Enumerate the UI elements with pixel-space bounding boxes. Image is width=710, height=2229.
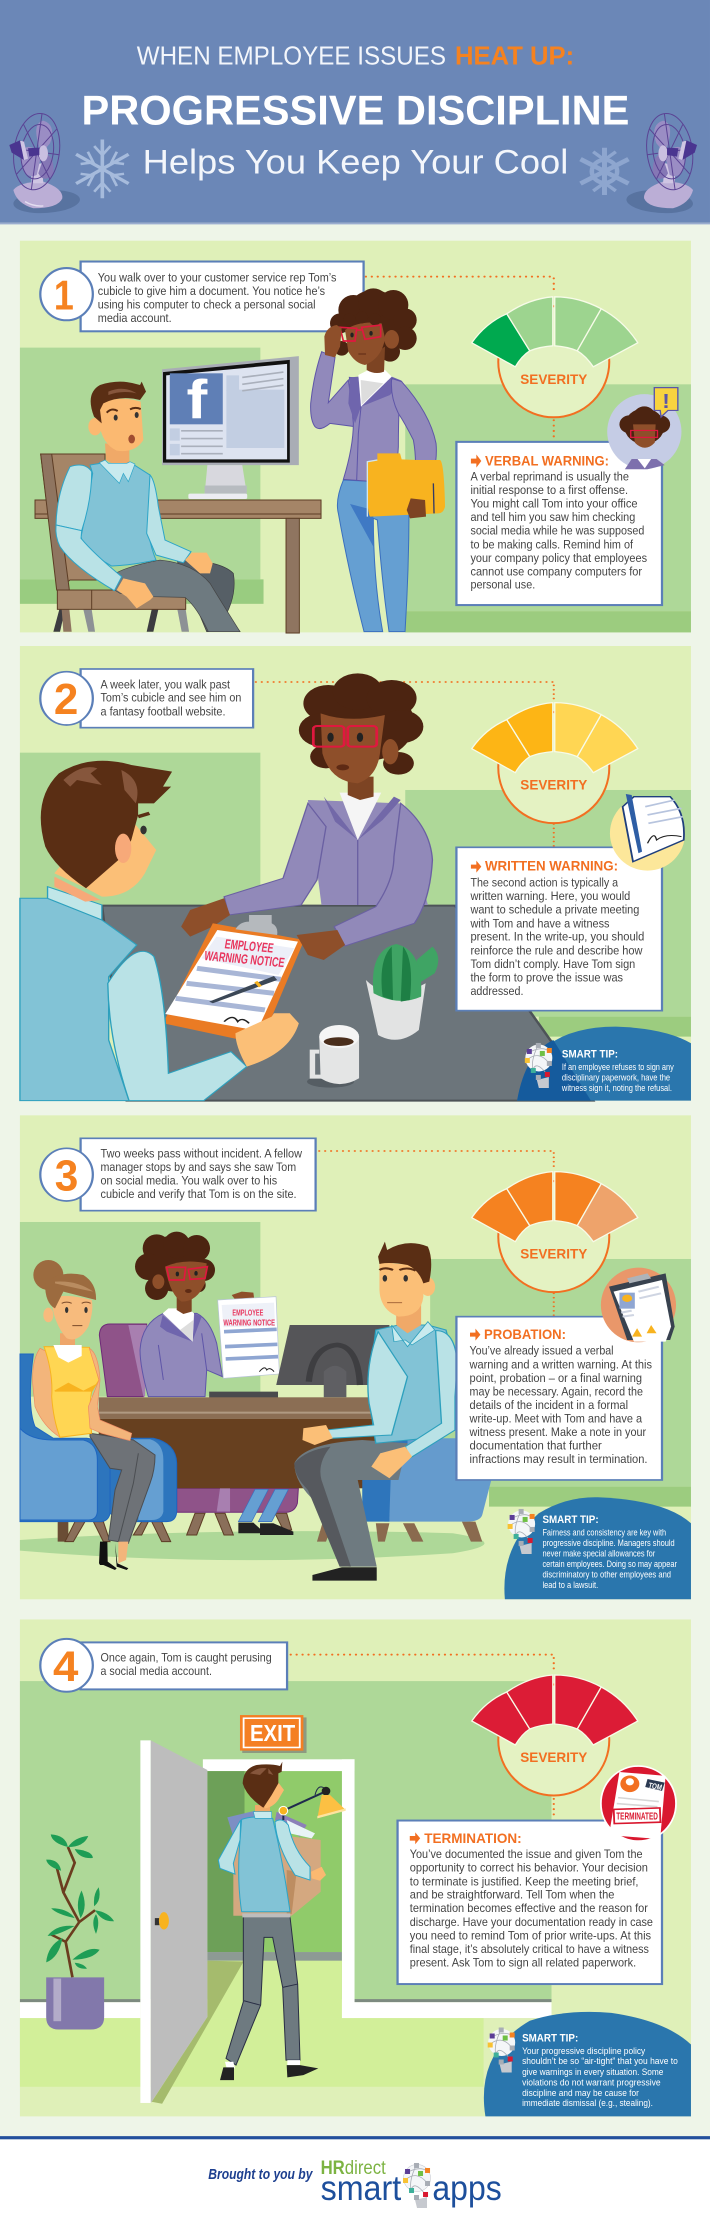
smart tip 4: discipline and may be cause for	[522, 2088, 639, 2099]
text box: termination: final stage, it’s absolutely critical to have a witness	[410, 1942, 649, 1956]
illustration: cactus in pot	[366, 944, 438, 1040]
callout: step 4 scenario: a social media account.	[101, 1664, 212, 1678]
logo: HRdirect smart apps: HRdirect	[321, 2158, 386, 2179]
callout: step 1 scenario: using his computer to check a personal social	[98, 298, 316, 311]
illustration: computer monitor with social page: f	[187, 369, 208, 430]
icon: smart bulb	[403, 2163, 431, 2208]
smart tip 4: Your progressive discipline policy	[522, 2047, 645, 2057]
text box: termination: TERMINATION:	[424, 1832, 522, 1847]
text box: termination: opportunity to correct his behavior. Your decision	[410, 1860, 648, 1874]
text box: verbal warning	[456, 442, 662, 605]
text box: verbal warning: initial response to a first offense.	[470, 484, 628, 497]
smart tip 3: lead to a lawsuit.	[542, 1580, 598, 1590]
icon: manager avatar with alert: !	[662, 390, 670, 413]
callout: step 4 scenario: Once again, Tom is caught perusing	[101, 1650, 272, 1664]
text box: termination: You’ve documented the issue and given Tom the	[410, 1847, 643, 1861]
severity gauge 4: SEVERITY	[520, 1749, 588, 1765]
text box: termination	[398, 1821, 662, 1984]
illustration: Tom leaving with box	[218, 1762, 346, 2080]
illustration: employee warning notice clipboard	[163, 915, 345, 1044]
step number 4: 4	[53, 1642, 79, 1690]
callout: step 1 scenario: cubicle to give him a document. You notice he’s	[98, 285, 325, 298]
panel 1: verbal warning	[20, 241, 691, 633]
dotted connector	[291, 1655, 554, 1819]
text box: probation: PROBATION:	[484, 1327, 566, 1342]
callout: step 4 scenario	[81, 1642, 287, 1689]
step number 3	[40, 1148, 93, 1201]
logo: HRdirect smart apps: apps	[432, 2169, 502, 2208]
severity gauge 2: SEVERITY	[520, 777, 588, 793]
severity gauge 2	[472, 703, 638, 823]
smart tip 3	[504, 1497, 691, 1599]
text box: verbal warning: VERBAL WARNING:	[485, 454, 609, 469]
callout: step 3 scenario: on social media. You walk over to his	[101, 1175, 277, 1188]
text box: written warning	[456, 847, 662, 1011]
header banner	[0, 0, 710, 224]
step number 1	[40, 268, 93, 320]
illustration: computer monitor with social page	[162, 356, 299, 499]
icon: right snowflake	[580, 148, 628, 195]
illustration: seated man at desk	[35, 382, 321, 633]
step number 1: 1	[54, 272, 74, 319]
callout: step 3 scenario	[81, 1138, 316, 1211]
panel 4: termination	[20, 1619, 691, 2116]
step number 2	[40, 672, 93, 725]
text box: written warning: WRITTEN WARNING:	[485, 859, 618, 874]
illustration: woman in blue chair	[20, 1260, 177, 1570]
illustration: open exit door	[140, 1740, 355, 2104]
icon: manager avatar with alert	[607, 388, 681, 469]
text box: probation	[456, 1317, 662, 1480]
severity gauge 3	[472, 1172, 638, 1292]
logo: HRdirect smart apps: smart	[321, 2169, 402, 2208]
text box: termination: you need to remind Tom of prior write-ups. At this	[410, 1928, 651, 1942]
title line 2: PROGRESSIVE DISCIPLINE	[82, 88, 629, 134]
text box: written warning: with Tom and have a witness	[470, 917, 609, 931]
dotted connector	[366, 277, 554, 441]
text box: verbal warning: A verbal reprimand is usually the	[470, 470, 629, 483]
text box: written warning: The second action is typically a	[470, 877, 618, 890]
text box: verbal warning: cannot use company computers for	[470, 565, 642, 578]
severity gauge 1	[472, 297, 638, 417]
text box: probation: You’ve already issued a verbal	[470, 1345, 614, 1358]
severity gauge 4	[472, 1675, 638, 1796]
icon: terminated record	[601, 1766, 676, 1841]
illustration: coffee mug	[307, 1025, 359, 1088]
icon: terminated record: TOM	[648, 1780, 663, 1792]
step number 3: 3	[55, 1152, 78, 1200]
icon: left snowflake	[76, 140, 129, 198]
icon: signed paper and pen	[610, 794, 685, 871]
icon: smart bulb	[488, 2027, 515, 2073]
callout: step 3 scenario: Two weeks pass without incident. A fellow	[101, 1147, 303, 1161]
callout: step 3 scenario: cubicle and verify that Tom is on the site.	[101, 1188, 297, 1201]
illustration: employee seen from behind	[20, 761, 299, 1101]
text box: verbal warning: You might call Tom into your office	[470, 497, 638, 510]
text box: probation: documentation that further	[470, 1440, 602, 1453]
title line 3: Helps You Keep Your Cool	[143, 142, 568, 181]
severity gauge 1: SEVERITY	[520, 371, 588, 387]
icon: employee record on clipboard	[601, 1268, 676, 1342]
smart tip 2	[517, 1027, 691, 1101]
illustration: manager with notice behind desk	[99, 1232, 298, 1535]
text box: written warning: addressed.	[470, 985, 523, 998]
callout: step 1 scenario: You walk over to your customer service rep Tom’s	[98, 271, 336, 284]
text box: termination: to terminate is justified. Keep the meeting brief,	[410, 1874, 638, 1888]
footer	[0, 2136, 710, 2229]
text box: written warning: Tom didn’t comply. Have Tom sign	[470, 958, 635, 971]
text box: written warning: written warning. Here, you would	[470, 890, 630, 903]
icon: terminated record: TERMINATED	[616, 1811, 658, 1822]
severity gauge 3: SEVERITY	[520, 1246, 588, 1262]
illustration: employee warning notice clipboard: EMPLOYEE	[224, 937, 274, 956]
icon: smart bulb	[525, 1043, 552, 1088]
illustration: manager across the table	[181, 673, 432, 946]
callout: step 2 scenario	[81, 669, 253, 728]
smart tip 4	[484, 2012, 691, 2116]
callout: step 2 scenario: Tom’s cubicle and see him on	[101, 692, 241, 705]
callout: step 1 scenario: media account.	[98, 311, 172, 325]
text box: termination: termination becomes effective and the reason for	[410, 1901, 649, 1915]
illustration: exit sign	[240, 1715, 307, 1753]
text box: verbal warning: and tell him you saw him checking	[470, 511, 635, 524]
step number 4	[40, 1639, 93, 1692]
callout: step 2 scenario: a fantasy football website.	[101, 706, 225, 719]
smart tip 4: violations do not warrant progressive	[522, 2078, 661, 2088]
text box: written warning: the form to prove the issue was	[470, 971, 623, 985]
smart tip 4: SMART TIP:	[522, 2031, 578, 2044]
text box: verbal warning: personal use.	[470, 578, 535, 592]
icon: right fan	[626, 111, 697, 215]
panel 3: probation	[20, 1115, 691, 1599]
illustration: manager with notice behind desk: WARNING NOTICE	[223, 1318, 275, 1328]
illustration: desk with computer	[99, 1325, 389, 1488]
title line 1: WHEN EMPLOYEE ISSUES	[137, 41, 446, 70]
dotted connector	[319, 1151, 554, 1316]
text box: termination: and be straightforward. Tell Tom when the	[410, 1888, 614, 1902]
illustration: Tom in blue chair	[294, 1242, 491, 1581]
illustration: exit sign: EXIT	[250, 1722, 295, 1747]
icon: smart bulb	[508, 1509, 535, 1554]
illustration: employee warning notice clipboard: WARNING NOTICE	[203, 949, 286, 971]
smart tip 4: give warnings in every situation. Some	[522, 2067, 664, 2078]
callout: step 2 scenario: A week later, you walk past	[101, 678, 230, 692]
illustration: standing manager with folder	[311, 288, 445, 632]
dotted connector	[256, 682, 554, 847]
smart tip 3: SMART TIP:	[542, 1513, 599, 1525]
smart tip 2: SMART TIP:	[562, 1048, 618, 1060]
text box: verbal warning: social media while he was supposed	[470, 524, 644, 537]
logo: HRdirect smart apps	[321, 2158, 502, 2208]
panel 2: written warning	[20, 646, 691, 1101]
illustration: potted plant	[46, 1834, 114, 2029]
text box: verbal warning: to be making calls. Remind him of	[470, 538, 633, 551]
illustration: meeting table	[102, 906, 593, 1101]
text box: probation: details of the incident in a formal	[470, 1399, 628, 1412]
title line 1: HEAT UP:	[455, 41, 574, 70]
callout: step 1 scenario	[81, 262, 364, 331]
illustration: manager with notice behind desk: EMPLOYEE	[232, 1308, 263, 1318]
icon: left fan	[9, 111, 81, 215]
credit text: Brought to you by	[208, 2166, 313, 2183]
text box: verbal warning: your company policy that employees	[470, 551, 647, 565]
text box: termination: present. Ask Tom to sign all related paperwork.	[410, 1956, 636, 1969]
step number 2: 2	[54, 675, 78, 724]
callout: step 3 scenario: manager stops by and says she saw Tom	[101, 1161, 296, 1174]
smart tip 4: immediate dismissal (e.g., stealing).	[522, 2099, 653, 2109]
